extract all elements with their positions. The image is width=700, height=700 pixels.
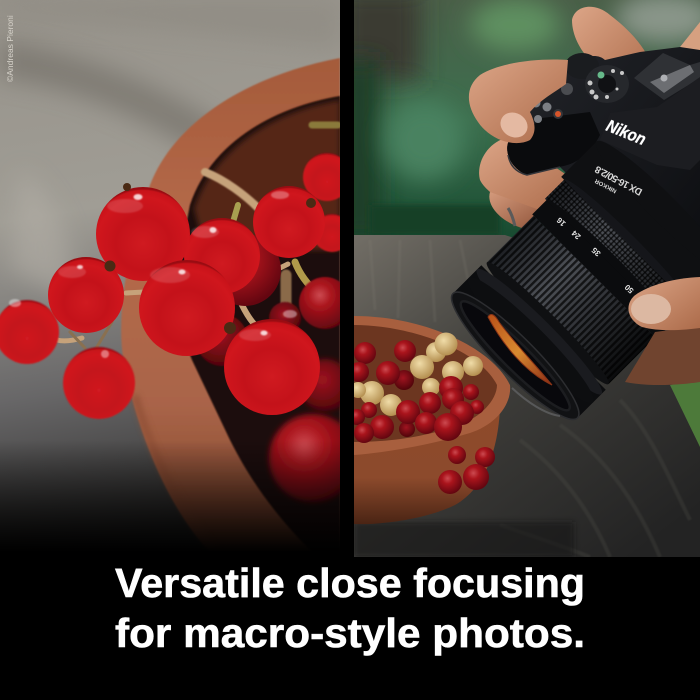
glass reflection (488, 315, 552, 385)
rim highlight (512, 388, 560, 416)
stems (57, 125, 338, 350)
wood surface background (0, 0, 340, 552)
grip (507, 112, 600, 175)
headline (115, 560, 585, 656)
lens (450, 141, 666, 420)
bottom shadow fade (0, 440, 340, 552)
front barrel (455, 262, 609, 416)
weathered wooden table (354, 235, 700, 557)
terracotta bowl with currants (349, 316, 510, 524)
lens marks: 16 (555, 215, 568, 228)
ridged zoom ring (487, 216, 655, 384)
small berries (349, 332, 495, 494)
berry highlights (9, 191, 297, 358)
lens name text: NIKKOR (594, 177, 618, 194)
buttons (532, 83, 573, 123)
Nikon camera body (507, 47, 700, 227)
blurred green foliage (340, 0, 700, 460)
index finger on shutter (469, 60, 568, 143)
red currant berries (0, 153, 357, 502)
lens marks (555, 215, 636, 295)
lens name text: DX 16-50/2.8 (593, 163, 644, 197)
thumb and palm in front of lens (625, 277, 700, 385)
lens marks: 35 (590, 245, 603, 258)
front rim (450, 291, 580, 420)
berry calyx tips (104, 183, 316, 334)
terracotta bowl (121, 58, 340, 552)
top dial (567, 53, 593, 70)
panel: left berry close-up photo (0, 0, 357, 552)
panel: right photographer photo (340, 0, 700, 557)
lens marks: 24 (570, 228, 583, 241)
forearm and thumb behind camera (479, 7, 700, 229)
rear ridged ring (545, 180, 666, 289)
front glass (460, 300, 571, 412)
Nikon logo: Nikon (604, 116, 649, 149)
hot shoe (634, 53, 700, 100)
lens mount (561, 141, 644, 212)
photo credit: ©Andreas Pieroni (5, 15, 15, 82)
headline: for macro-style photos. (115, 610, 585, 656)
viewfinder prism with logo (660, 77, 700, 170)
headline: Versatile close focusing (115, 560, 585, 606)
zoom scale band (532, 200, 666, 335)
lens marks: 50 (623, 282, 636, 295)
mode dial (585, 65, 629, 103)
